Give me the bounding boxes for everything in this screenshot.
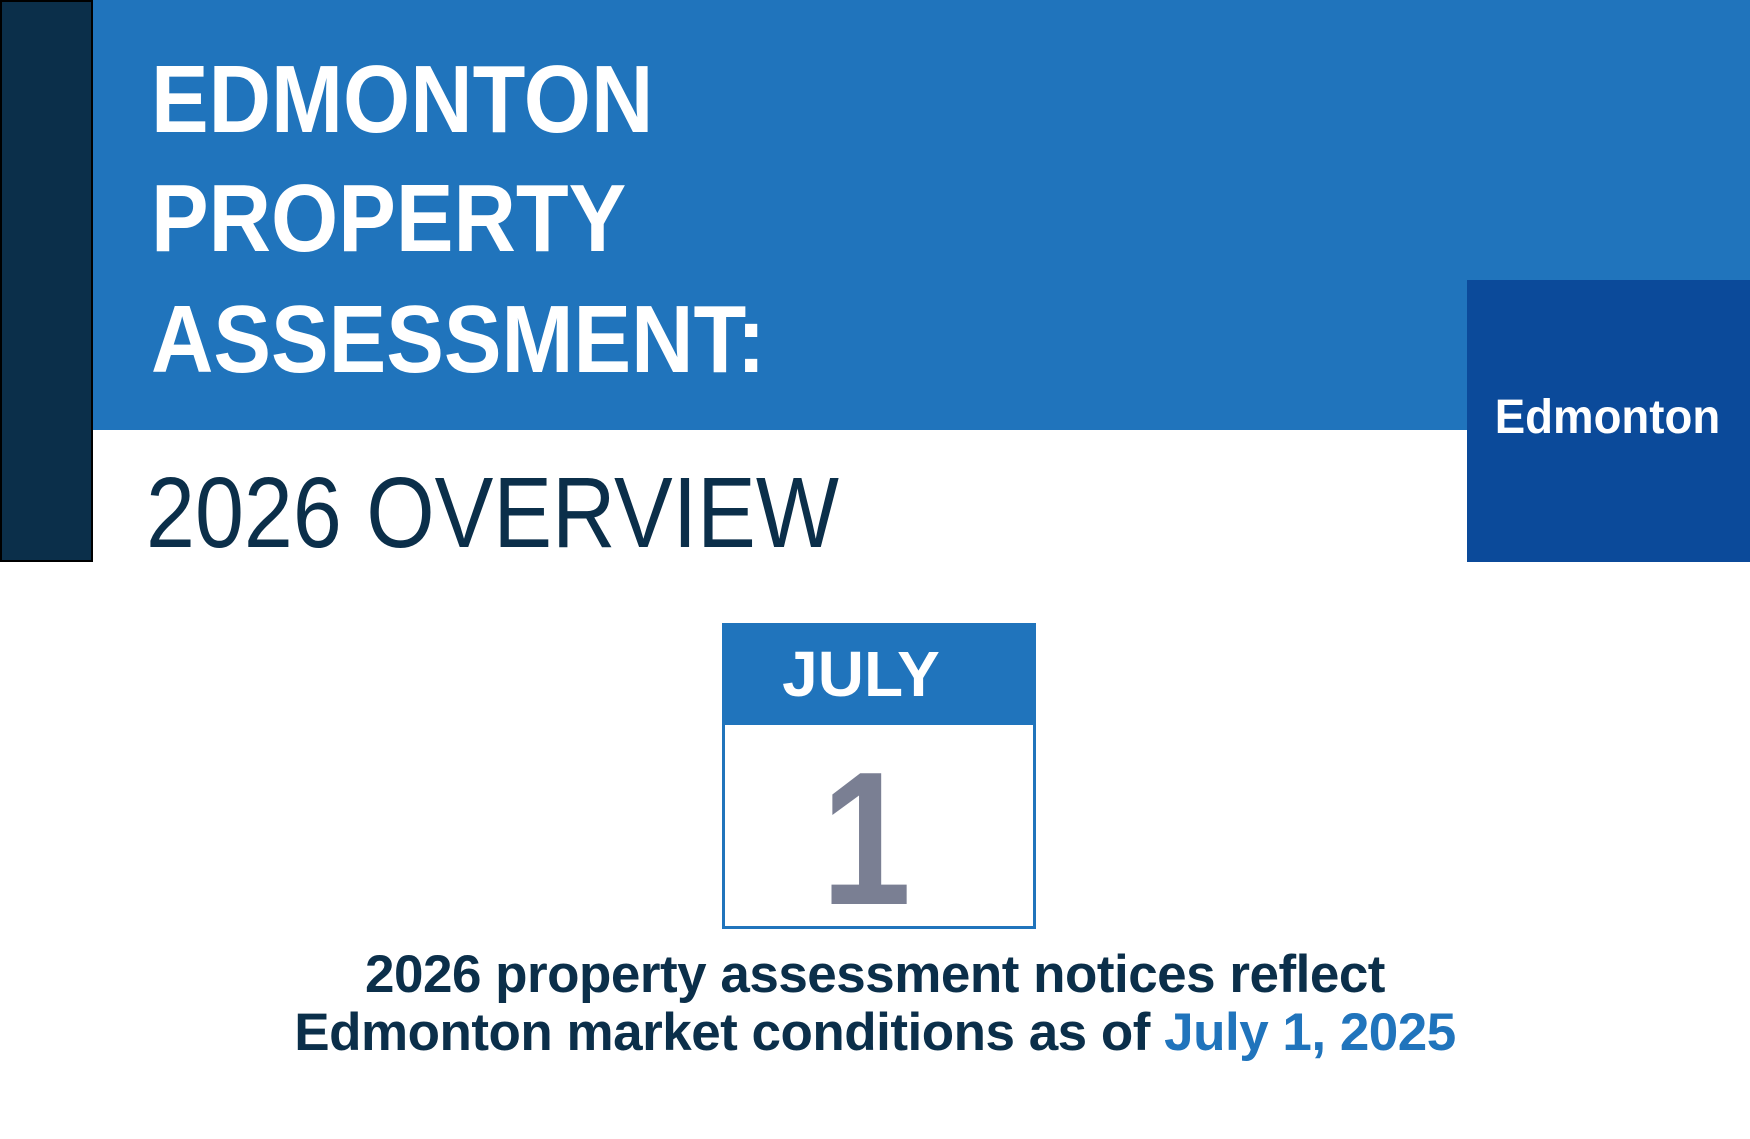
title: EDMONTON (151, 46, 653, 153)
left dark bar (0, 0, 93, 562)
logo: Edmonton (1495, 391, 1720, 444)
subtitle: 2026 OVERVIEW (146, 457, 839, 569)
calendar day number: 1 (821, 733, 911, 945)
title: PROPERTY (151, 165, 626, 272)
caption: Edmonton market conditions as of July 1, 2025 (294, 1003, 1456, 1062)
calendar header: JULY (722, 623, 1036, 725)
title: ASSESSMENT: (151, 286, 766, 393)
calendar header: JULY: JULY (782, 638, 940, 710)
caption: 2026 property assessment notices reflect (365, 945, 1385, 1004)
logo (1467, 280, 1750, 562)
calendar icon (722, 623, 1036, 929)
title (151, 46, 766, 393)
header band (93, 0, 1750, 430)
caption (294, 945, 1456, 1062)
